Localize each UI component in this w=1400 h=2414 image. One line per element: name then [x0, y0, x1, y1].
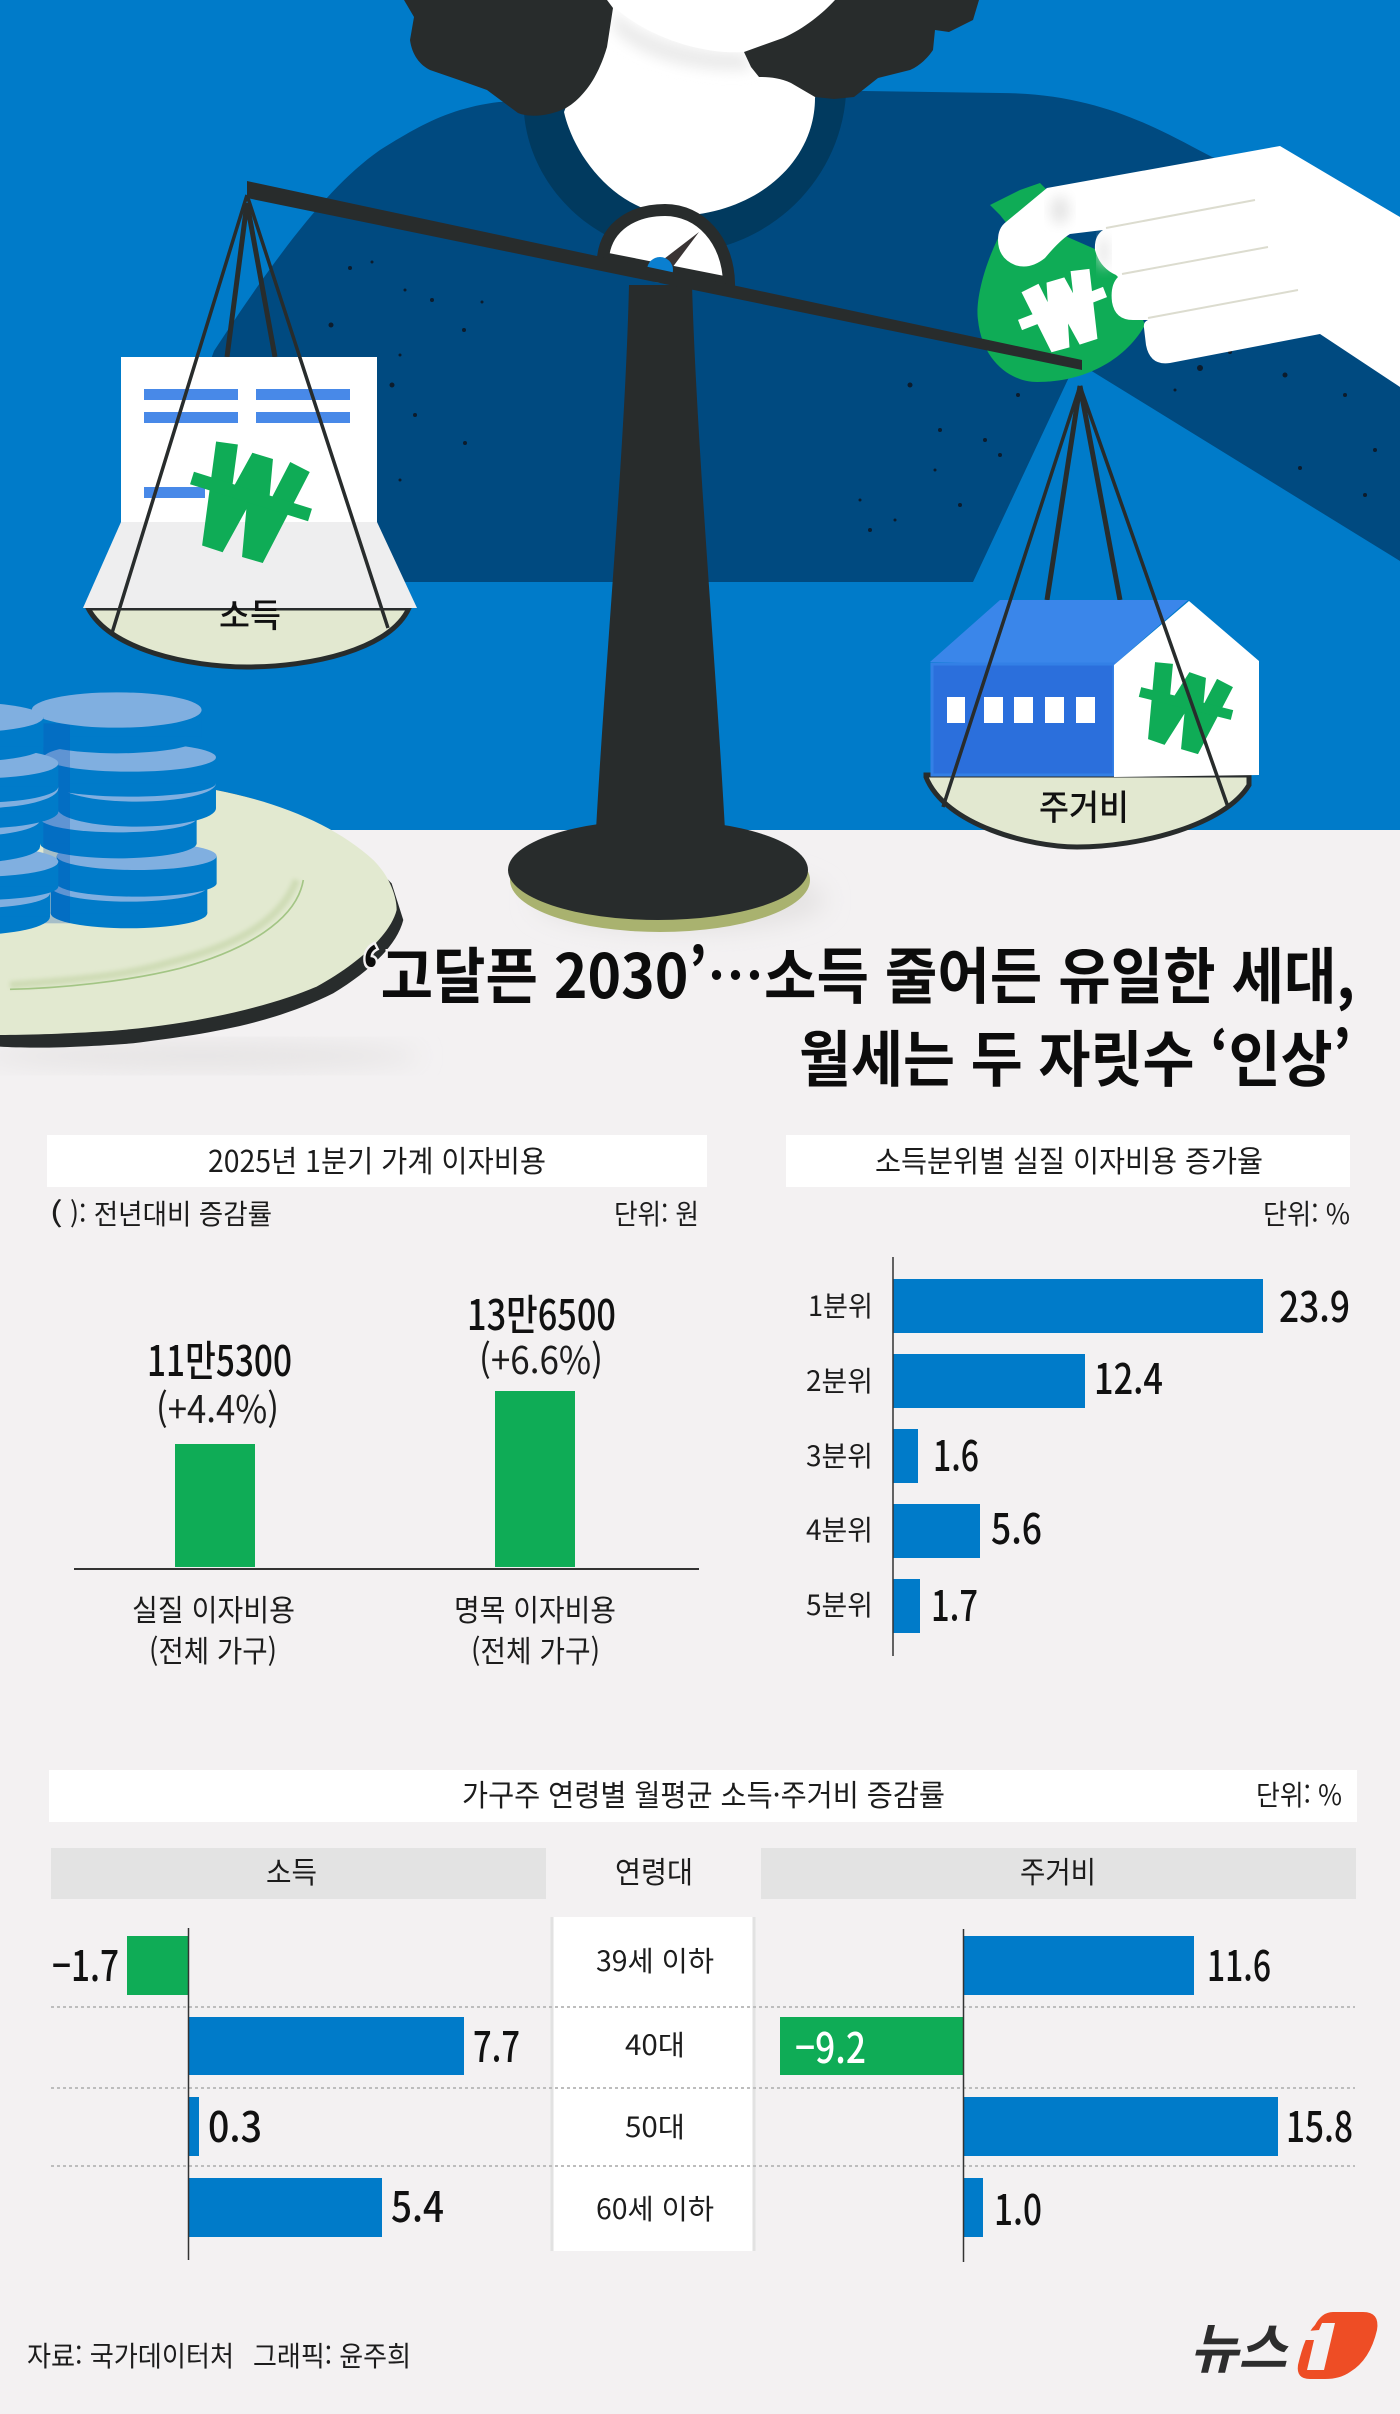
scale stand [508, 285, 810, 932]
hand [998, 146, 1400, 387]
speckles on sweater [328, 260, 1377, 532]
right pan with house [926, 386, 1259, 847]
bar chart: 2분위 [806, 1360, 873, 1400]
heading: income and housing cost change by age: 단위: % [1256, 1774, 1342, 1814]
bar chart [806, 1257, 1350, 1656]
house windows [947, 697, 1095, 723]
age column: 60세 이하 [596, 2188, 714, 2228]
age column: 39세 이하 [596, 1940, 714, 1980]
scale beam [247, 181, 1082, 370]
diverging bars: housing cost: 11.6 [1207, 1933, 1271, 1994]
heading: household interest cost [47, 1135, 707, 1187]
icon: green won sign [192, 443, 310, 558]
base shadow [535, 868, 825, 932]
label: housing cost: 주거비 [1039, 780, 1129, 831]
icon: green won sign on house [1140, 663, 1232, 750]
bar chart: 1.6 [933, 1423, 979, 1484]
collar [524, 60, 846, 253]
column chart: 명목 이자비용 [454, 1586, 616, 1630]
column chart: 실질 이자비용 [132, 1586, 295, 1630]
diverging bars: housing cost: 1.0 [994, 2177, 1042, 2238]
table shadow of plate [0, 1044, 420, 1068]
logo: News1 [1190, 2305, 1377, 2384]
heading: increase by income quintile [786, 1135, 1350, 1187]
column header: housing cost [761, 1848, 1356, 1899]
neck and face [564, 0, 835, 216]
diverging bars: income [52, 1928, 520, 2260]
column header: income [51, 1848, 546, 1899]
coin stack left [0, 702, 58, 935]
heading: household interest cost: 2025년 1분기 가계 이자비용 [208, 1137, 546, 1181]
panel: household interest cost [47, 1135, 707, 1671]
face chin [607, 0, 835, 52]
left pan with income document [83, 195, 417, 667]
house gable [1114, 601, 1259, 777]
diverging bars: income: 5.4 [391, 2174, 444, 2235]
neck shading [613, 10, 752, 71]
coin stack right [32, 692, 217, 928]
column chart: 13만6500 [467, 1282, 616, 1343]
pan [926, 775, 1249, 847]
bar chart: 1분위 [808, 1285, 873, 1325]
bar chart: 12.4 [1094, 1346, 1163, 1407]
age column: 50대 [625, 2106, 685, 2146]
gauge [603, 210, 729, 283]
diverging bars: housing cost: 15.8 [1286, 2094, 1353, 2155]
pan [88, 608, 409, 667]
age column [552, 1917, 754, 2251]
title [362, 927, 1355, 1099]
bar chart: 5.6 [991, 1496, 1042, 1557]
bar chart: 4분위 [806, 1509, 873, 1549]
diverging bars: housing cost [780, 1929, 1353, 2262]
right pan outer strings [943, 386, 1228, 807]
icon: white won sign on bag [1020, 270, 1105, 348]
column chart: (전체 가구) [471, 1627, 600, 1671]
panel: income and housing cost change by age [49, 1770, 1357, 2262]
house front [932, 664, 1114, 775]
left pan outer strings [112, 195, 388, 633]
heading: income and housing cost change by age [49, 1770, 1357, 1822]
logo: News1: 뉴스 [1190, 2305, 1289, 2384]
label: income: 소득 [219, 589, 281, 637]
column chart: (+6.6%) [479, 1330, 603, 1385]
bar chart: 3분위 [806, 1435, 873, 1475]
footer source and credit: 그래픽: 윤주희 [253, 2335, 411, 2375]
column chart [74, 1282, 699, 1671]
heading: income and housing cost change by age: 가구주 연령별 월평균 소득·주거비 증감률 [462, 1771, 945, 1815]
unit: percent: 단위: % [1263, 1193, 1350, 1233]
bar chart: 1.7 [931, 1573, 978, 1634]
money bag [977, 183, 1145, 382]
document lower flare [83, 522, 417, 608]
column chart: (+4.4%) [156, 1379, 279, 1434]
title: ‘고달픈 2030’⋯소득 줄어든 유일한 세대, [362, 927, 1355, 1016]
column chart: 11만5300 [147, 1328, 292, 1389]
footer source and credit: 자료: 국가데이터처 [27, 2335, 234, 2375]
diverging bars: income: −1.7 [52, 1933, 119, 1994]
bar chart: 5분위 [806, 1584, 873, 1624]
note: year-on-year change: ( [49, 1193, 63, 1233]
illustration: scales weighing income against housing costs [0, 0, 1400, 1068]
column header: income: 소득 [266, 1848, 317, 1892]
column chart: (전체 가구) [149, 1627, 277, 1671]
diverging bars: housing cost: −9.2 [795, 2015, 866, 2076]
house roof [930, 600, 1188, 665]
column header: housing cost: 주거비 [1020, 1848, 1096, 1892]
diverging bars: income: 7.7 [473, 2014, 520, 2075]
heading: increase by income quintile: 소득분위별 실질 이자비용 증가율 [875, 1137, 1263, 1181]
title: 월세는 두 자릿수 ‘인상’ [799, 1010, 1351, 1099]
hair right [744, 0, 979, 99]
panel: increase by income quintile [786, 1135, 1350, 1656]
hair left [404, 0, 613, 116]
document [121, 357, 377, 522]
diverging bars: income: 0.3 [208, 2094, 262, 2155]
unit: won: 단위: 원 [614, 1193, 699, 1233]
plate with coins [0, 692, 403, 1048]
sweater torso and arm [130, 91, 1400, 582]
note: year-on-year change: ): 전년대비 증감률 [70, 1193, 272, 1233]
left pan inner strings [227, 203, 275, 357]
footer source and credit [27, 2335, 411, 2375]
age column: 40대 [625, 2024, 685, 2064]
right pan inner strings [1047, 386, 1120, 600]
column header: age group: 연령대 [615, 1848, 693, 1892]
bar chart: 23.9 [1279, 1274, 1350, 1335]
